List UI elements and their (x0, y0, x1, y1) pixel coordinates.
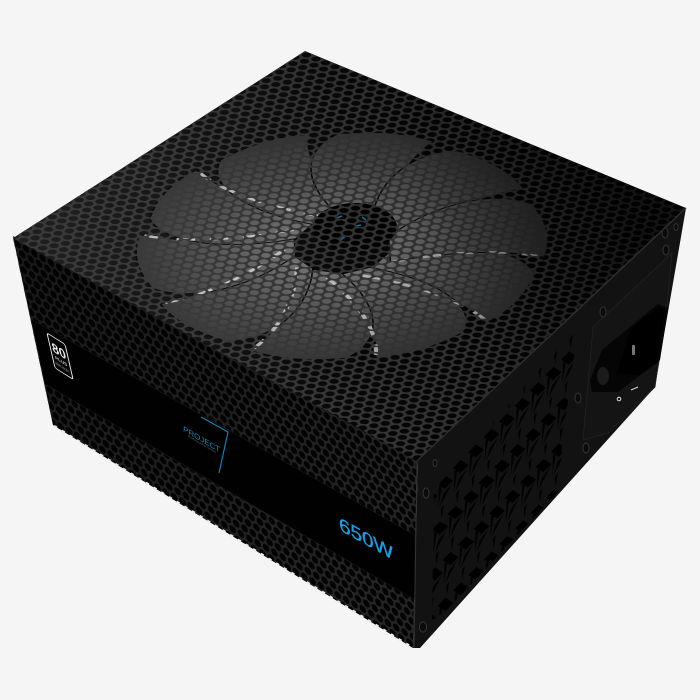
switch tick (631, 387, 638, 390)
black label band (31, 319, 415, 600)
badge word: PLUS (55, 355, 69, 369)
top face base (13, 51, 686, 461)
front mesh (13, 238, 418, 648)
front shading (13, 238, 418, 648)
inlet recess (590, 304, 668, 392)
icon: fan hub (313, 203, 397, 251)
vent grid (432, 325, 578, 620)
bottom edge teeth (54, 426, 413, 648)
panel: right face with vents and connector (413, 208, 686, 648)
inlet pin (632, 345, 635, 355)
badge tier: BRONZE (55, 362, 71, 374)
badge outline (47, 333, 73, 379)
panel: top face with perforated mesh and fan (0, 40, 700, 470)
switch dot (617, 397, 621, 401)
power switch (597, 367, 609, 385)
logo wordmark: PROJECT (183, 425, 220, 454)
icon: 80 Plus badge (47, 333, 73, 379)
logo bracket (201, 417, 228, 473)
front face base (13, 236, 418, 648)
screws (420, 224, 678, 632)
panel: front face (13, 236, 418, 648)
ridge highlight (418, 208, 686, 460)
logo tagline: Performance Series (188, 434, 217, 454)
hub blue markings (337, 216, 372, 240)
wattage label: 650W (338, 513, 395, 565)
icon: fan blades (135, 133, 548, 360)
corner highlight (414, 462, 417, 648)
perforated mesh (0, 40, 700, 470)
badge number: 80 (50, 340, 68, 364)
power inlet (617, 307, 665, 375)
mesh shading (220, 52, 686, 432)
connector plate (583, 253, 672, 440)
right face base (413, 208, 686, 648)
